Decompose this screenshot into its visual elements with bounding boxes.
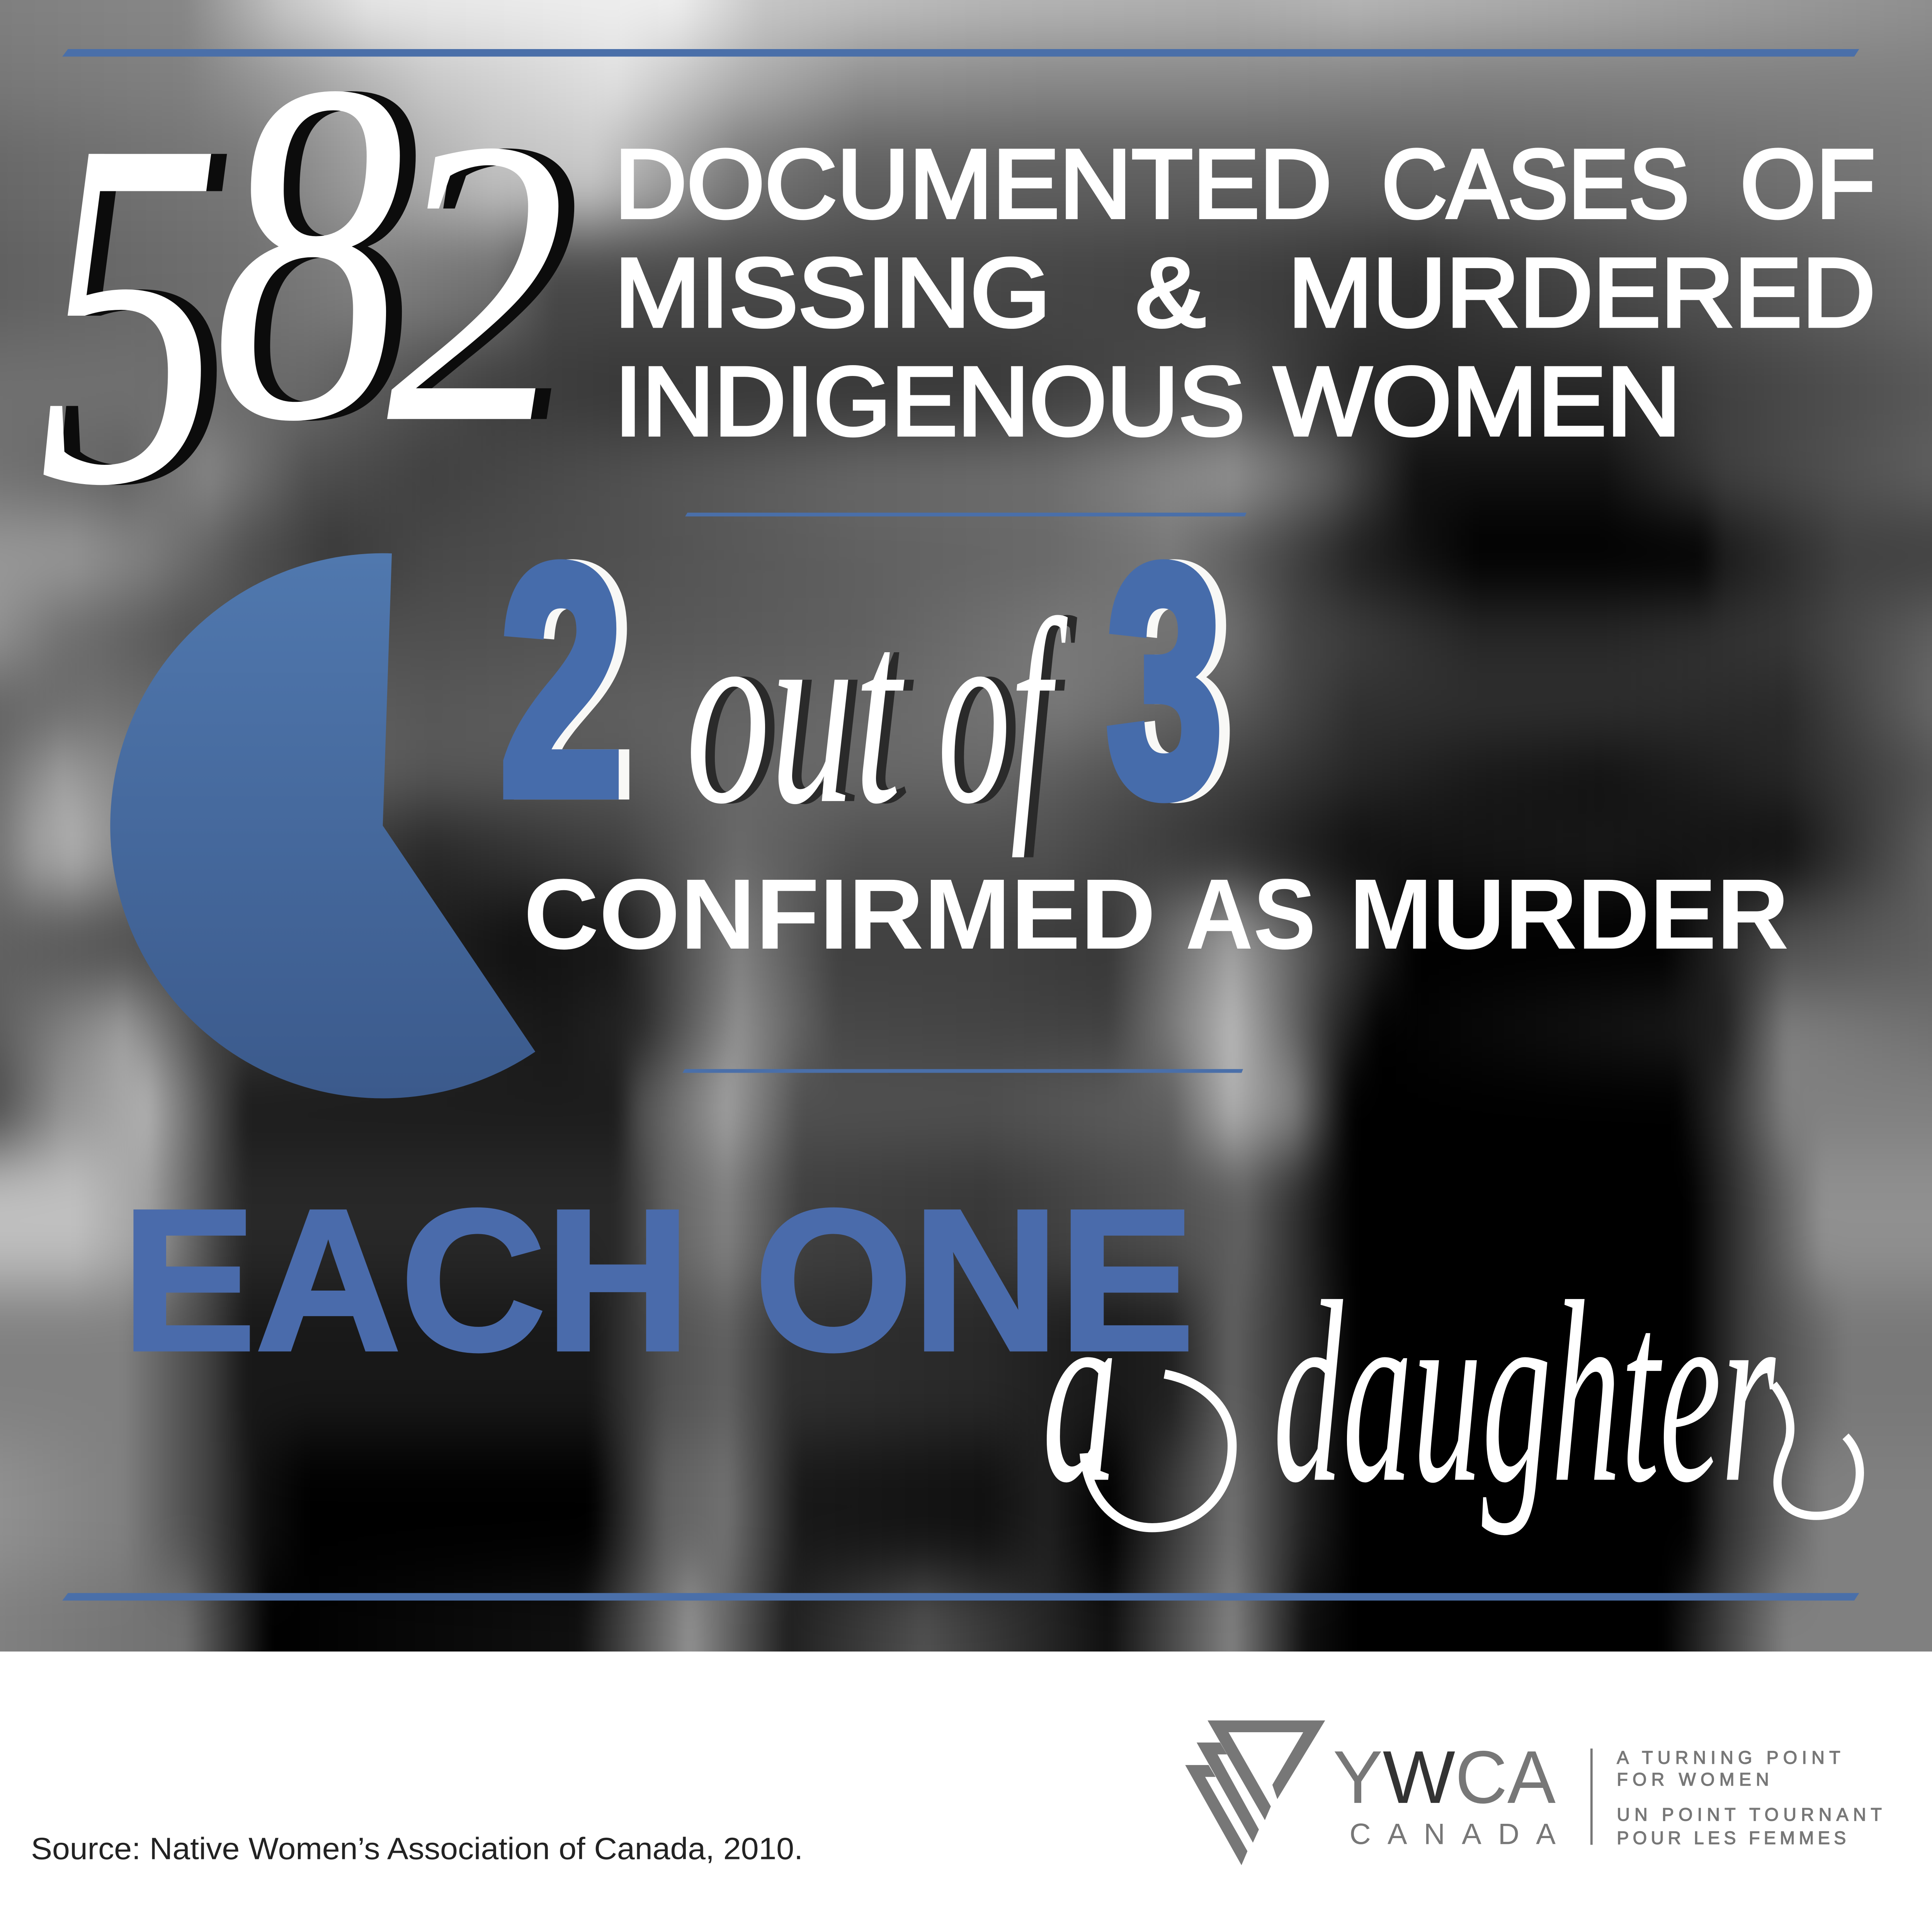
logo divider [1590,1748,1593,1845]
heading: confirmed as murder: CONFIRMED [524,858,1156,970]
wordmark: YWCA: Y [1333,1735,1383,1819]
headline: documented cases: & [1136,238,1205,347]
headline: documented cases: OF [1740,130,1875,238]
headline: documented cases: DOCUMENTED [614,130,1332,238]
top rule [62,49,1859,57]
script: a daughter: a [1042,1248,1118,1536]
wordmark: YWCA: A [1507,1735,1556,1819]
numerals white shadow: 3 [1117,499,1233,862]
script: a daughter [1042,1248,1860,1537]
source note: Source: Native Women’s Association of Canada, 2010. [31,1831,803,1866]
swirl on r [1774,1384,1860,1516]
heading: each one [122,1168,1194,1393]
heading: confirmed as murder: AS [1185,858,1316,970]
headline: documented cases: CASES [1382,130,1689,238]
headline: documented cases: INDIGENOUS [614,347,1245,456]
numeral shadow: 5 [54,37,238,588]
numeral face: 5 [38,37,222,588]
tagline [1617,1747,1882,1848]
heading: each one: ONE [755,1168,1194,1393]
numerals blue face: 3 [1107,499,1222,862]
tagline: UN POINT TOURNANT [1617,1804,1882,1825]
numerals white shadow: 2 [511,500,634,862]
numeral shadow [54,0,582,588]
bottom rule [62,1593,1859,1600]
tagline: FOR WOMEN [1617,1769,1769,1789]
wordmark: YWCA: C [1455,1735,1507,1819]
headline: documented cases [614,130,1875,456]
heading: confirmed as murder: MURDER [1349,858,1789,970]
heading: confirmed as murder [524,858,1789,970]
numeral face: 2 [387,55,566,508]
headline: documented cases: WOMEN [1274,347,1681,456]
numeral face [38,0,566,588]
headline: documented cases: MISSING [614,238,1051,347]
numerals white shadow [511,499,1233,862]
script words shadow: out [696,566,916,858]
divider rule one [685,513,1247,516]
script words face: out [686,566,907,858]
tagline: POUR LES FEMMES [1617,1828,1846,1848]
divider rule two [682,1069,1243,1073]
script words face: of [938,566,1070,859]
swirl on a [1084,1374,1232,1528]
numerals blue face: 2 [500,500,623,862]
YWCA Canada logo [1185,1721,1882,1865]
wordmark: YWCA [1333,1735,1556,1819]
numerals blue face [500,499,1222,862]
tagline: A TURNING POINT [1617,1747,1840,1767]
script words shadow: of [947,566,1079,859]
icon: triangular chevrons [1185,1721,1325,1865]
stat: 2 out of 3 [500,499,1233,862]
numeral shadow: 2 [403,55,582,508]
heading: each one: EACH [122,1168,690,1393]
headline: documented cases: MURDERED [1288,238,1875,347]
pie chart: two thirds [110,553,535,1099]
stat: 582 numeral [38,0,582,588]
wordmark: Canada: CANADA [1350,1818,1556,1850]
wordmark: YWCA: W [1383,1735,1455,1819]
